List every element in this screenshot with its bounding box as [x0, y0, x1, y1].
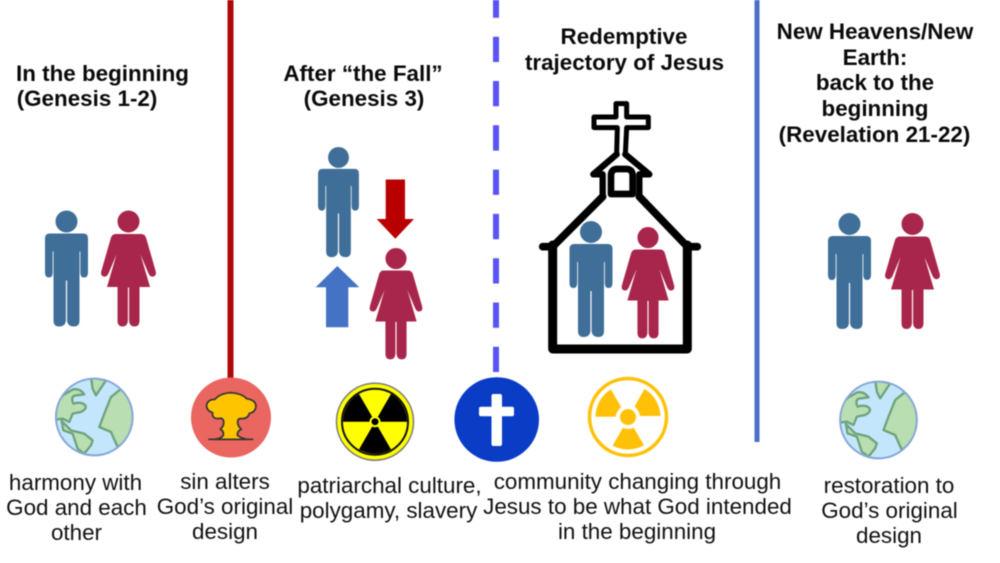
text: community changing: community changing through [494, 469, 781, 494]
heading: new heavens new earth: back to the [816, 70, 934, 95]
icon: radiation symbol yellow outline [588, 378, 666, 459]
icon: earth [50, 377, 137, 455]
text: sin alters: God’s original [157, 494, 293, 519]
text: community changing: Jesus to be what God intended [483, 494, 792, 519]
text: harmony: other [51, 520, 103, 545]
divider: red line [228, 0, 234, 381]
icon: radiation symbol black and yellow [335, 383, 414, 463]
arrow: blue up [316, 266, 359, 327]
divider: dashed blue line [493, 0, 499, 372]
figures: man and woman in the beginning [45, 210, 156, 326]
heading: after the fall: (Genesis 3) [304, 86, 424, 111]
heading: in the beginning: (Genesis 1-2) [17, 86, 157, 111]
icon: mushroom cloud [191, 378, 271, 458]
text: community changing: in the beginning [558, 519, 716, 544]
divider: solid blue line [754, 0, 760, 442]
heading: new heavens new earth: Earth: [843, 45, 907, 70]
heading: new heavens new earth: beginning [822, 96, 928, 121]
icon: church with man and woman [543, 104, 697, 349]
heading: after the fall [283, 61, 443, 111]
figures: man and woman restored [828, 213, 940, 329]
heading: after the fall: After “the Fall” [283, 61, 443, 86]
text: patriarchal culture [297, 473, 482, 523]
text: restoration: design [856, 523, 922, 548]
heading: new heavens new earth: New Heavens/New [777, 19, 974, 44]
figures: man over woman after the fall [318, 147, 422, 359]
text: sin alters: sin alters [180, 469, 270, 494]
text: harmony [6, 470, 147, 545]
heading: redemptive trajectory [525, 24, 724, 75]
text: harmony: harmony with [9, 470, 142, 495]
heading: redemptive trajectory: Redemptive [561, 24, 687, 49]
icon: cross in blue circle [454, 377, 539, 462]
heading: new heavens new earth: (Revelation 21-22) [779, 122, 970, 147]
text: sin alters: design [192, 519, 258, 544]
text: community changing [483, 469, 792, 544]
heading: in the beginning [16, 61, 189, 111]
text: patriarchal culture: patriarchal culture, [297, 473, 482, 498]
arrow: red down [377, 180, 414, 239]
heading: redemptive trajectory: trajectory of Jesus [525, 50, 724, 75]
text: patriarchal culture: polygamy, slavery [300, 498, 478, 523]
heading: new heavens new earth [777, 19, 974, 147]
icon: earth restored [834, 380, 921, 458]
text: sin alters [157, 469, 293, 544]
text: restoration: restoration to [824, 473, 954, 498]
text: restoration [821, 473, 958, 548]
text: harmony: God and each [6, 495, 147, 520]
text: restoration: God’s original [821, 498, 958, 523]
heading: in the beginning: In the beginning [16, 61, 189, 86]
